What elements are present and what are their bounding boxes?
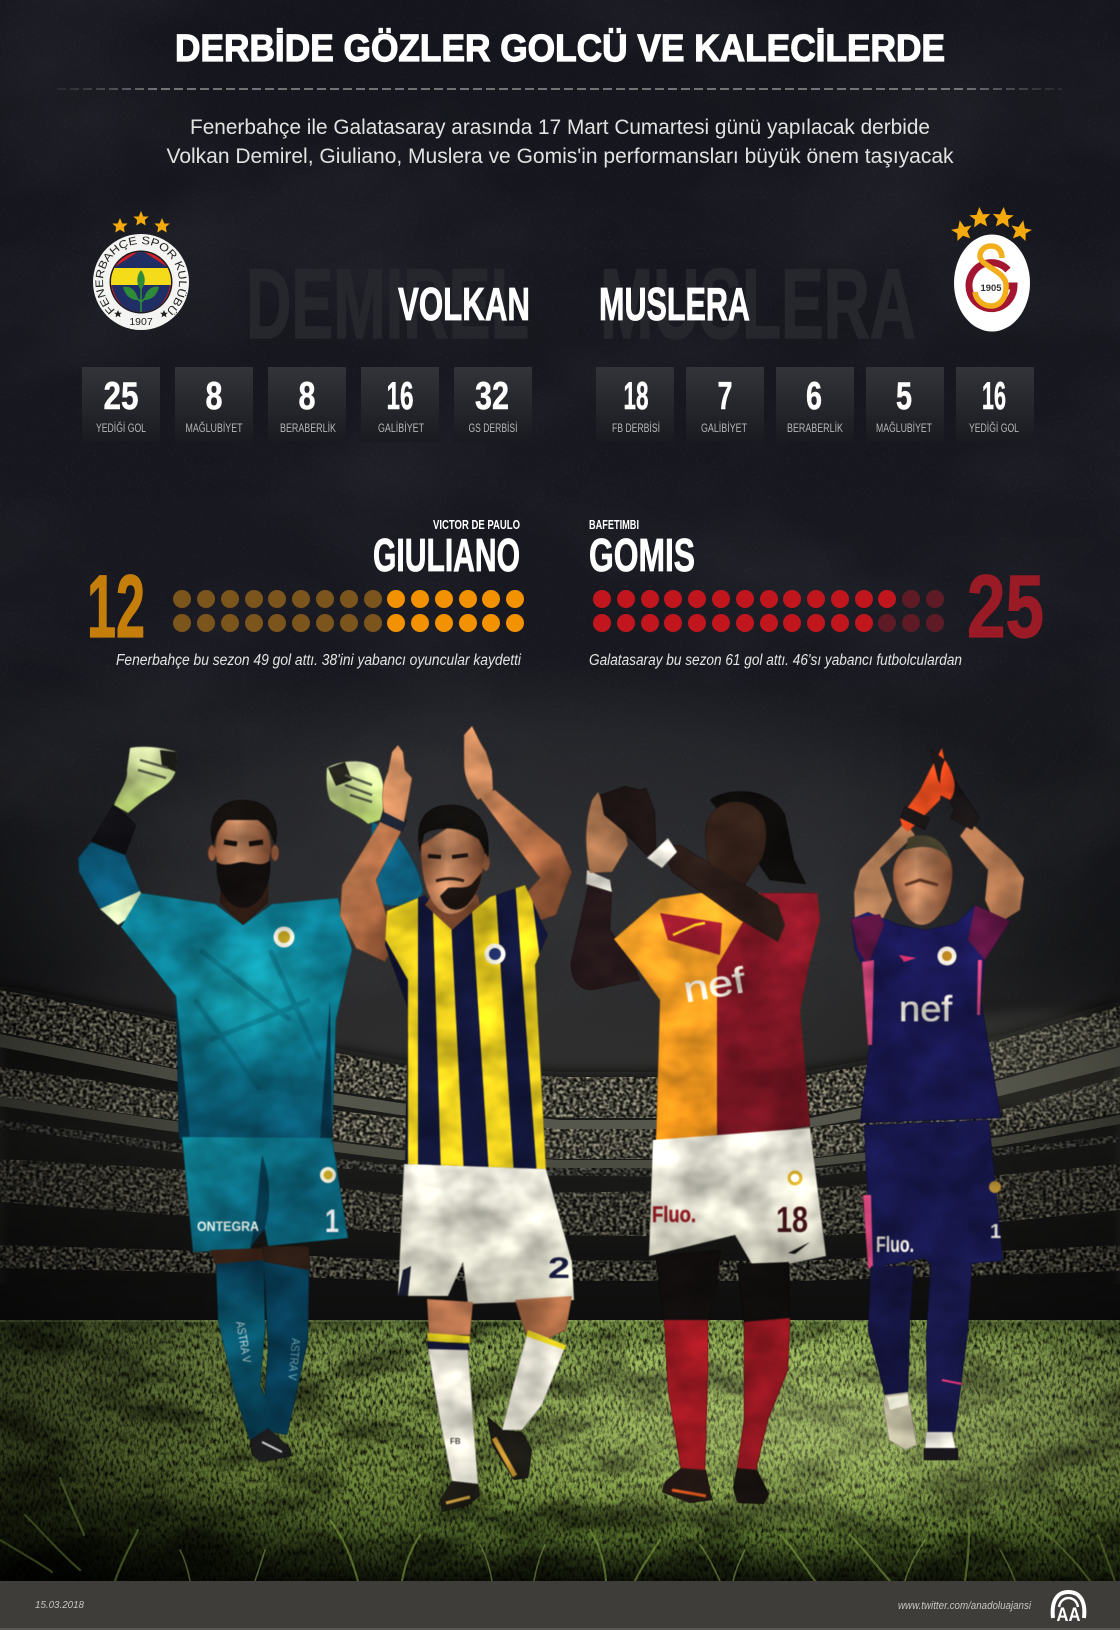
boots [883, 1392, 917, 1450]
stat boxes: Volkan: GS DERBİSİ [468, 422, 518, 435]
stat boxes: Muslera: BERABERLİK [787, 422, 843, 435]
stat boxes: Volkan: 8 [298, 375, 316, 418]
player name: Gomis [589, 518, 695, 581]
caption: Fenerbahçe: Fenerbahçe bu sezon 49 gol attı. 38'ini yabancı oyuncular kaydetti [116, 652, 521, 669]
goals number: 12: 12 [87, 556, 145, 656]
intro text [166, 115, 954, 168]
name: MUSLERA: MUSLERA [599, 278, 750, 330]
neck and head [425, 895, 480, 930]
hands [586, 792, 628, 873]
head [220, 880, 268, 925]
shorts [649, 1128, 826, 1271]
player: Muslera [851, 748, 1024, 1460]
icon: Anadolu Agency logo: AA [1056, 1605, 1081, 1626]
far arm [571, 878, 640, 990]
jersey [614, 893, 820, 1141]
logo: Fenerbahçe [93, 211, 189, 330]
raised arm [91, 804, 136, 855]
date: 15.03.2018 [35, 1599, 84, 1611]
legs [427, 1299, 473, 1335]
player: Giuliano: 2 [548, 1252, 570, 1285]
player: Volkan Demirel: ONTEGRA [197, 1219, 259, 1234]
jersey [121, 893, 352, 1140]
title: DERBİDE GÖZLER GOLCÜ VE KALECİLERDE [175, 27, 945, 70]
legs [656, 1250, 721, 1322]
ghost surname: MUSLERA: MUSLERA [600, 248, 916, 359]
logo: Fenerbahçe: 1907 [129, 316, 153, 328]
name: VOLKAN: VOLKAN [398, 278, 530, 330]
dot chart: Fenerbahçe goals [173, 590, 524, 632]
shorts [398, 1164, 574, 1304]
icon: Anadolu Agency logo [1053, 1592, 1084, 1626]
arms [854, 822, 915, 925]
player: Muslera: nef [899, 988, 953, 1029]
intro text: Volkan Demirel, Giuliano, Muslera ve Gomis'in performansları büyük önem taşıyacak [166, 144, 954, 168]
gloves [900, 748, 946, 832]
stat boxes: Volkan: 16 [386, 375, 414, 418]
logo: Galatasaray: 1905 [980, 283, 1002, 294]
stat boxes: Volkan: 25 [104, 375, 138, 418]
boots [662, 1468, 712, 1503]
left arm and hand [340, 812, 406, 962]
boots [440, 1481, 480, 1512]
glove [114, 747, 177, 813]
intro text: Fenerbahçe ile Galatasaray arasında 17 Mart Cumartesi günü yapılacak derbide [190, 115, 930, 139]
player: Volkan Demirel [78, 747, 423, 1462]
player: Volkan Demirel: ASTRA V [233, 1320, 254, 1364]
player: Giuliano [340, 726, 574, 1512]
player name: Giuliano: GIULIANO [373, 529, 520, 581]
player: Gomis: nef [680, 959, 749, 1010]
far arm sleeve [368, 822, 423, 906]
stat boxes: Volkan: MAĞLUBİYET [186, 422, 242, 435]
caption: Galatasaray: Galatasaray bu sezon 61 gol attı. 46'sı yabancı futbolculardan [589, 652, 962, 669]
player: Volkan Demirel: 1 [325, 1203, 339, 1239]
stat boxes: Volkan: BERABERLİK [280, 422, 336, 435]
footer bar [0, 1581, 1120, 1630]
twitter link: www.twitter.com/anadoluajansi [898, 1600, 1031, 1612]
pitch grass [0, 770, 1120, 1581]
far glove [326, 761, 384, 824]
player: Gomis: 18 [776, 1199, 808, 1240]
stat boxes: Muslera: 16 [982, 375, 1006, 418]
stat boxes: Muslera: MAĞLUBİYET [876, 422, 932, 435]
stat boxes: Muslera: GALİBİYET [701, 422, 747, 435]
shorts [864, 1120, 1003, 1268]
legs [210, 1248, 265, 1266]
player name: Giuliano: VICTOR DE PAULO [433, 518, 520, 532]
stat boxes: Muslera [596, 367, 1034, 442]
logo: Galatasaray [949, 206, 1034, 332]
stat boxes: Volkan: GALİBİYET [378, 422, 424, 435]
stat boxes: Muslera: 7 [718, 375, 732, 418]
right arm and hand [478, 790, 572, 925]
stat boxes: Volkan: 32 [475, 375, 509, 418]
player: Gomis [571, 786, 826, 1504]
head [893, 842, 953, 925]
head [705, 802, 766, 885]
shorts [182, 1137, 348, 1252]
stat boxes: Muslera: 18 [624, 375, 648, 418]
stat boxes: Muslera: 6 [806, 375, 822, 418]
stat boxes: Volkan [82, 367, 532, 442]
ghost surname: DEMIREL: DEMIREL [246, 248, 529, 359]
boots [250, 1428, 292, 1462]
player name: Giuliano [373, 518, 520, 581]
stat boxes: Muslera: 5 [896, 375, 912, 418]
jersey stripes [380, 880, 555, 1175]
player: Muslera: Fluo. [876, 1232, 914, 1257]
jersey [851, 905, 1010, 1123]
logo: Fenerbahçe: FENERBAHÇE SPOR KULÜBÜ [95, 236, 187, 316]
dot chart: Galatasaray goals [593, 590, 944, 632]
legs [868, 1266, 914, 1395]
player: Volkan Demirel: ASTRA V [285, 1338, 303, 1381]
player name: Gomis: GOMIS [589, 529, 695, 581]
player: Giuliano: FB [450, 1437, 461, 1446]
stat boxes: Muslera: YEDİĞİ GOL [969, 422, 1019, 435]
stat boxes: Muslera: FB DERBİSİ [612, 422, 660, 435]
stat boxes: Volkan: YEDİĞİ GOL [96, 422, 146, 435]
player name: Gomis: BAFETIMBI [589, 518, 639, 532]
near arm [662, 845, 785, 942]
hair [710, 791, 806, 884]
stat boxes: Volkan: 8 [206, 375, 222, 418]
stadium stands [0, 960, 1120, 1325]
goals number: 25: 25 [967, 556, 1044, 656]
player: Muslera: 1 [990, 1221, 1001, 1243]
player: Gomis: Fluo. [652, 1202, 696, 1227]
